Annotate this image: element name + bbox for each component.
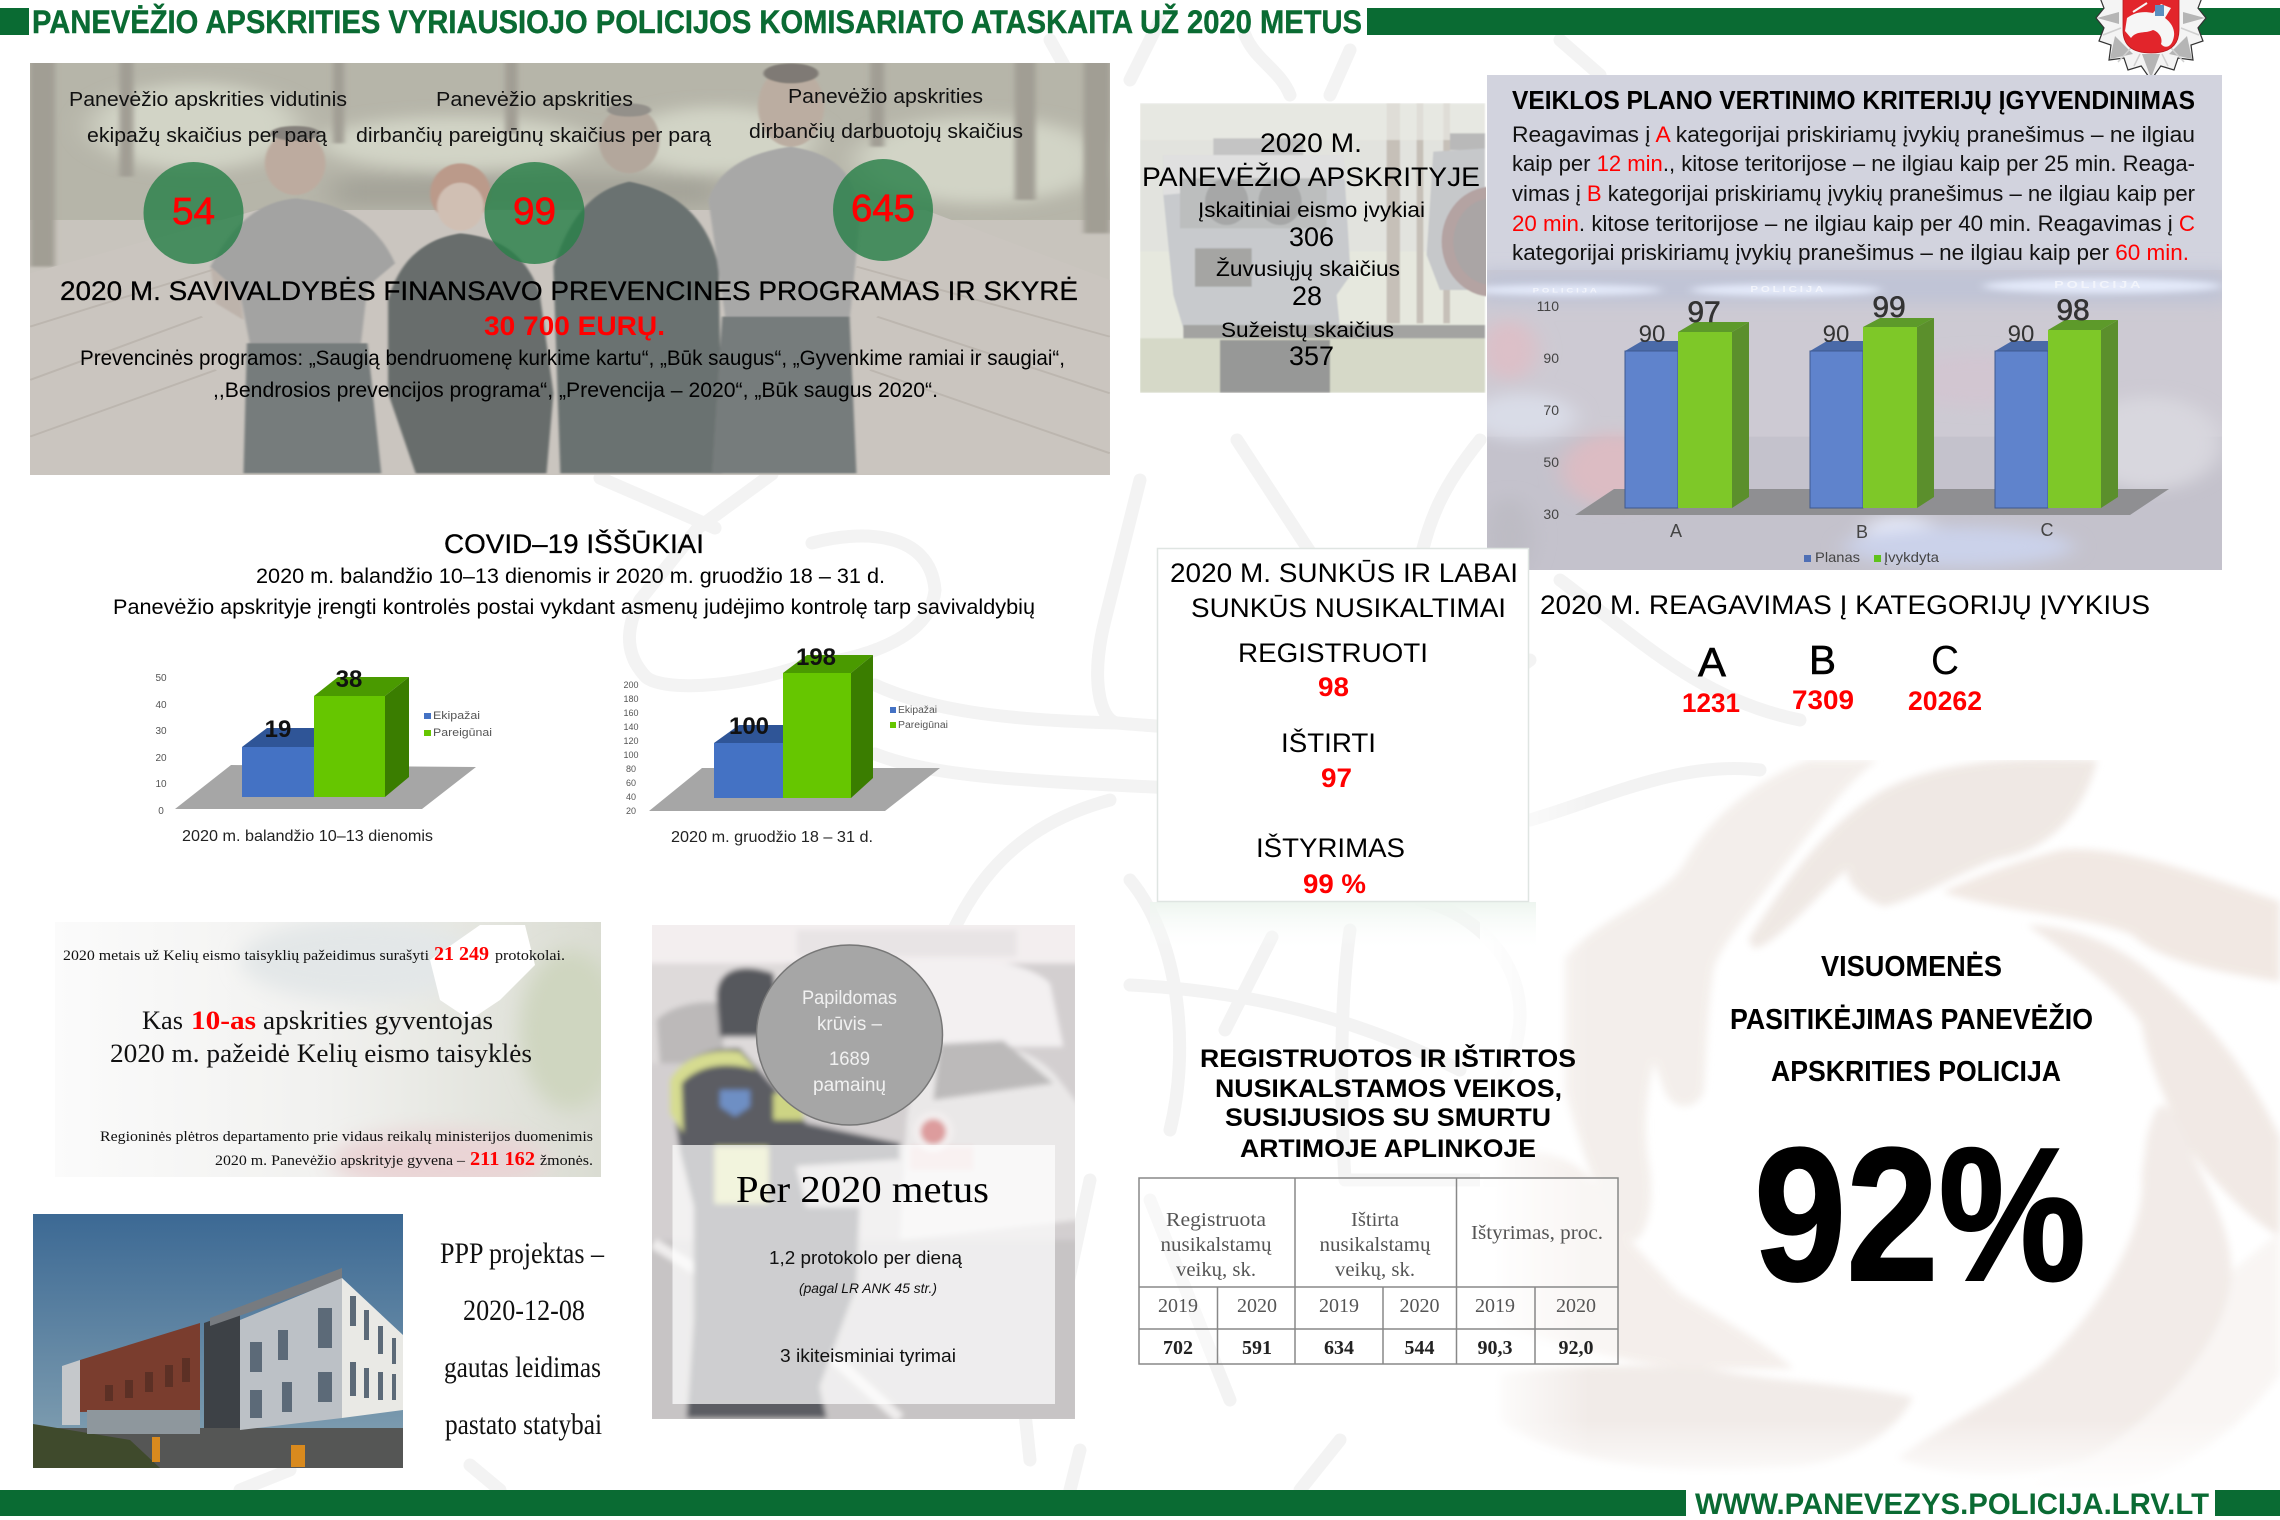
legend bbox=[424, 710, 492, 739]
table: Ištirta bbox=[1351, 1209, 1399, 1231]
image: new police building bbox=[33, 1214, 403, 1468]
bar chart: April 10-13: 10 bbox=[155, 779, 167, 790]
figures bbox=[1238, 638, 1428, 899]
heading: SUSIJUSIOS SU SMURTU bbox=[1225, 1104, 1551, 1132]
heading: PASITIKĖJIMAS PANEVĖŽIO bbox=[1730, 1002, 2093, 1036]
hand: upper left bbox=[1565, 760, 1878, 1241]
legend: Pareigūnai bbox=[898, 720, 948, 731]
category labels: B bbox=[1856, 522, 1868, 542]
legend: Ekipažai bbox=[898, 705, 937, 716]
paragraph: response time rules bbox=[1512, 122, 2195, 265]
table: 90,3 bbox=[1478, 1337, 1512, 1359]
bar chart: December 18-31: 160 bbox=[623, 708, 639, 718]
table: 634 bbox=[1324, 1337, 1354, 1359]
text block: prevention programmes: 30 700 EURŲ. bbox=[484, 311, 665, 341]
background watermark: police star bbox=[240, 20, 1800, 1490]
table: 2020 bbox=[1400, 1295, 1440, 1317]
heading: SUNKŪS NUSIKALTIMAI bbox=[1191, 593, 1506, 623]
footer bar bbox=[0, 1488, 2280, 1520]
panel: traffic violations: 211 162 bbox=[470, 1148, 535, 1170]
value labels bbox=[1639, 291, 2090, 348]
table: 2020 bbox=[1556, 1295, 1596, 1317]
accident figures: Žuvusiųjų skaičius bbox=[1216, 258, 1400, 281]
bar chart: plan vs done: 70 bbox=[1543, 402, 1559, 418]
table: 702 bbox=[1163, 1337, 1193, 1359]
hand: right bbox=[2027, 925, 2280, 1237]
panel: traffic violations bbox=[64, 922, 601, 1177]
panel: police officers photo with staff stats bbox=[30, 60, 1110, 480]
officer bbox=[717, 968, 780, 1037]
bar chart: December 18-31: 2020 m. gruodžio 18 – 31 d. bbox=[671, 829, 873, 846]
panel: traffic violations: apskrities gyventojas bbox=[263, 1006, 493, 1035]
heading bbox=[1170, 558, 1518, 623]
accident figures: 357 bbox=[1289, 341, 1334, 371]
category labels: C bbox=[2040, 520, 2054, 540]
camera housing bbox=[1163, 178, 1351, 326]
table: 2020 bbox=[1237, 1295, 1277, 1317]
table: 2019 bbox=[1158, 1295, 1198, 1317]
panel: traffic accidents with speed camera: PANEVĖŽIO APSKRITYJE bbox=[1142, 161, 1480, 192]
text block: staff captions bbox=[69, 86, 1023, 147]
legend: Planas bbox=[1815, 549, 1860, 565]
category A bbox=[1682, 639, 1740, 718]
legend: Ekipažai bbox=[433, 710, 480, 722]
bar chart: December 18-31: 200 bbox=[623, 680, 639, 690]
circle: extra workload: 1689 bbox=[829, 1049, 870, 1070]
bar chart: plan vs done: 90 bbox=[1543, 350, 1559, 366]
officer 2 bbox=[388, 163, 553, 473]
panel: traffic violations: 2020 metais už Kelių eismo taisyklių pažeidimus surašyti bbox=[63, 948, 429, 964]
circle: employees 645 bbox=[833, 159, 933, 261]
text block: PPP project: 2020-12-08 bbox=[463, 1294, 585, 1327]
heading: 2020 M. SUNKŪS IR LABAI bbox=[1170, 558, 1518, 588]
bar chart: April 10-13: 38 bbox=[336, 666, 362, 693]
text block: prevention programmes: Prevencinės programos: „Saugią bendruomenę kurkime kartu“, „Būk saugus“, „Gyvenkime ramiai ir saugiai“, bbox=[80, 347, 1065, 370]
table: 2019 bbox=[1475, 1295, 1515, 1317]
description: Panevėžio apskrityje įrengti kontrolės postai vykdant asmenų judėjimo kontrolę tarp savivaldybių bbox=[113, 596, 1035, 619]
bar chart: April 10-13 bbox=[155, 666, 492, 845]
heading: NUSIKALSTAMOS VEIKOS, bbox=[1215, 1075, 1562, 1103]
bar chart: December 18-31: 140 bbox=[623, 722, 639, 732]
bar chart: April 10-13: 50 bbox=[155, 673, 167, 684]
hand: top bbox=[1749, 759, 2097, 949]
description: 2020 m. balandžio 10–13 dienomis ir 2020 m. gruodžio 18 – 31 d. bbox=[256, 565, 885, 588]
hand: left lower bbox=[1525, 1155, 1788, 1370]
bar chart: December 18-31: 80 bbox=[626, 764, 636, 774]
value labels: 90 bbox=[1823, 321, 1849, 348]
panel: activity plan criteria: POLICIJA bbox=[1750, 286, 1826, 294]
bars B bbox=[1810, 318, 1934, 508]
bar chart: April 10-13: 19 bbox=[265, 716, 291, 743]
table: Registruota bbox=[1166, 1209, 1266, 1231]
bar chart: December 18-31: 20 bbox=[626, 806, 636, 816]
accident figures bbox=[1198, 199, 1425, 371]
value labels: 90 bbox=[2008, 321, 2034, 348]
circle: employees 645: 645 bbox=[851, 188, 915, 230]
accident figures: 306 bbox=[1289, 222, 1334, 252]
heading: COVID–19 IŠŠŪKIAI bbox=[444, 528, 704, 559]
category A: A bbox=[1698, 639, 1727, 685]
circle: officers 99: 99 bbox=[513, 191, 556, 233]
bars A bbox=[1625, 322, 1749, 508]
heading bbox=[1200, 1043, 1576, 1163]
bar chart: December 18-31: 60 bbox=[626, 778, 636, 788]
panel: traffic accidents with speed camera bbox=[1140, 103, 1486, 393]
legend: Įvykdyta bbox=[1884, 549, 1939, 565]
accident figures: 28 bbox=[1292, 281, 1322, 311]
circle: officers 99 bbox=[484, 162, 584, 264]
bar chart: plan vs done bbox=[1537, 291, 2169, 565]
table: 544 bbox=[1404, 1337, 1434, 1359]
table: nusikalstamų bbox=[1320, 1234, 1432, 1256]
paragraph: response time rules: kaip per 12 min., kitose teritorijose – ne ilgiau kaip per 25 min. Reaga- bbox=[1512, 151, 2195, 176]
text block: PPP project bbox=[440, 1237, 605, 1441]
category C: 20262 bbox=[1908, 686, 1982, 716]
value labels: 99 bbox=[1872, 291, 1906, 324]
arm: top right bbox=[1943, 849, 2280, 982]
panel: traffic violations: 2020 m. pažeidė Kelių eismo taisyklės bbox=[110, 1039, 532, 1068]
table: 591 bbox=[1242, 1337, 1272, 1359]
panel: traffic violations: žmonės. bbox=[540, 1153, 593, 1169]
icon: police star badge bbox=[2096, 0, 2206, 80]
text block: staff captions: Panevėžio apskrities bbox=[436, 89, 633, 111]
big number: 92% bbox=[1754, 1109, 2086, 1321]
panel: serious crimes bbox=[1150, 548, 1536, 952]
figures: 99 % bbox=[1303, 869, 1366, 899]
officer 3 bbox=[553, 103, 722, 473]
arm: lower right wrist bbox=[1998, 1232, 2280, 1500]
panel: traffic violations: Kas bbox=[142, 1006, 183, 1035]
second camera unit bbox=[1450, 133, 1485, 150]
text block: prevention programmes: ,,Bendrosios prevencijos programa“, „Prevencija – 2020“, „Būk saugus 2020“. bbox=[213, 379, 938, 402]
panel: traffic violations: 2020 m. Panevėžio apskrityje gyvena – bbox=[215, 1153, 466, 1169]
heading: VEIKLOS PLANO VERTINIMO KRITERIJŲ ĮGYVENDINIMAS bbox=[1512, 85, 2195, 115]
text block: staff captions: Panevėžio apskrities bbox=[788, 86, 983, 108]
bar chart: December 18-31: 180 bbox=[623, 694, 639, 704]
panel: activity plan criteria: POLICIJA bbox=[1533, 287, 1600, 294]
table: veikų, sk. bbox=[1335, 1259, 1415, 1281]
panel: traffic violations: protokolai. bbox=[495, 948, 565, 964]
heading: 2020 M. bbox=[1260, 128, 1362, 158]
table: Ištyrimas, proc. bbox=[1471, 1222, 1603, 1244]
bar chart: plan vs done: 110 bbox=[1537, 298, 1559, 314]
figures: IŠTYRIMAS bbox=[1256, 832, 1405, 863]
details: 3 ikiteisminiai tyrimai bbox=[780, 1346, 956, 1366]
heading: ARTIMOJE APLINKOJE bbox=[1240, 1135, 1536, 1163]
value labels: 90 bbox=[1639, 321, 1665, 348]
table: 92,0 bbox=[1558, 1337, 1594, 1359]
paragraph: response time rules: kategorijai priskiriamų įvykių pranešimus – ne ilgiau kaip per 60 min. bbox=[1512, 240, 2189, 265]
text block: PPP project: gautas leidimas bbox=[444, 1351, 601, 1384]
panel: traffic officer workload bbox=[647, 920, 1080, 1423]
bar chart: December 18-31 bbox=[623, 644, 948, 846]
category C bbox=[1908, 637, 1982, 716]
title: PANEVĖŽIO APSKRITIES VYRIAUSIOJO POLICIJOS KOMISARIATO ATASKAITA UŽ 2020 METUS bbox=[32, 4, 1362, 40]
paragraph: response time rules: vimas į B kategorijai priskiriamų įvykių pranešimus – ne ilgiau kaip per bbox=[1512, 181, 2195, 206]
paragraph: response time rules: Reagavimas į A kategorijai priskiriamų įvykių pranešimus – ne ilgiau bbox=[1512, 122, 2195, 147]
heading: APSKRITIES POLICIJA bbox=[1771, 1056, 2061, 1088]
panel: activity plan criteria bbox=[1470, 75, 2230, 580]
category B: B bbox=[1809, 637, 1836, 683]
header bar bbox=[0, 4, 2280, 40]
legend: Pareigūnai bbox=[433, 727, 492, 739]
text block: prevention programmes: 2020 M. SAVIVALDYBĖS FINANSAVO PREVENCINES PROGRAMAS IR SKYRĖ bbox=[60, 275, 1078, 306]
description bbox=[113, 565, 1035, 619]
panel: response to category events bbox=[1540, 590, 2150, 718]
figures: 98 bbox=[1318, 672, 1349, 702]
legend bbox=[890, 705, 948, 731]
panel: response to category events: 2020 M. REAGAVIMAS Į KATEGORIJŲ ĮVYKIUS bbox=[1540, 590, 2150, 620]
circle: extra workload: pamainų bbox=[813, 1075, 886, 1096]
circle: extra workload: krūvis – bbox=[817, 1014, 882, 1035]
bars C bbox=[1995, 320, 2118, 508]
bar chart: April 10-13: 40 bbox=[155, 700, 167, 711]
category labels: A bbox=[1670, 521, 1682, 541]
text block: staff captions: dirbančių pareigūnų skaičius per parą bbox=[356, 125, 712, 147]
category B: 7309 bbox=[1792, 685, 1854, 715]
accident figures: Sužeistų skaičius bbox=[1221, 319, 1394, 342]
officer 1 bbox=[210, 126, 395, 473]
text block: prevention programmes bbox=[60, 275, 1078, 402]
details: (pagal LR ANK 45 str.) bbox=[799, 1280, 937, 1296]
table: nusikalstamų bbox=[1160, 1234, 1273, 1256]
panel: traffic violations: 21 249 bbox=[434, 943, 489, 965]
bar chart: December 18-31: 120 bbox=[623, 736, 639, 746]
paragraph: response time rules: 20 min. kitose teritorijose – ne ilgiau kaip per 40 min. Reagavimas į C bbox=[1512, 211, 2195, 236]
panel: covid-19 challenges bbox=[113, 528, 1035, 846]
circle: extra workload: Papildomas bbox=[802, 988, 897, 1009]
panel: domestic violence offences bbox=[1139, 1043, 1618, 1364]
panel: traffic violations: Regioninės plėtros departamento prie vidaus reikalų ministerijos duomenimis bbox=[100, 1129, 593, 1145]
text block: staff captions: Panevėžio apskrities vidutinis bbox=[69, 89, 347, 111]
circle: patrol crews 54 bbox=[144, 162, 244, 264]
category B bbox=[1792, 637, 1854, 715]
hand: lower right bbox=[1898, 1105, 2231, 1476]
category A: 1231 bbox=[1682, 688, 1740, 718]
hand: bottom left bbox=[1500, 1366, 1913, 1470]
bar chart: April 10-13: 20 bbox=[155, 753, 167, 764]
bar chart: December 18-31: 40 bbox=[626, 792, 636, 802]
panel: activity plan criteria: POLICIJA bbox=[2054, 279, 2143, 290]
details bbox=[769, 1248, 963, 1366]
category labels bbox=[1670, 520, 2054, 542]
figures: IŠTIRTI bbox=[1281, 727, 1376, 758]
bar chart: December 18-31: 100 bbox=[729, 713, 769, 740]
legend bbox=[1804, 549, 1939, 565]
panel: hands ring background bbox=[1480, 759, 2280, 1500]
mount and post bbox=[1183, 325, 1485, 338]
details: 1,2 protokolo per dieną bbox=[769, 1248, 963, 1268]
text block: staff captions: ekipažų skaičius per parą bbox=[87, 125, 328, 147]
accident figures: Įskaitiniai eismo įvykiai bbox=[1198, 199, 1425, 222]
bar chart: plan vs done: 30 bbox=[1543, 506, 1559, 522]
category C: C bbox=[1931, 637, 1959, 683]
bar chart: plan vs done: 50 bbox=[1543, 454, 1559, 470]
circle: extra workload bbox=[756, 945, 942, 1125]
heading: VISUOMENĖS bbox=[1821, 951, 2002, 983]
circle: patrol crews 54: 54 bbox=[172, 191, 215, 233]
text block: staff captions: dirbančių darbuotojų skaičius bbox=[749, 121, 1023, 143]
bar chart: April 10-13: 2020 m. balandžio 10–13 dienomis bbox=[182, 828, 433, 845]
panel: public trust bbox=[1730, 951, 2093, 1321]
bar chart: April 10-13: 0 bbox=[158, 806, 164, 817]
heading bbox=[1730, 951, 2093, 1088]
figures: 97 bbox=[1321, 763, 1352, 793]
table: veikų, sk. bbox=[1176, 1259, 1256, 1281]
text block: PPP project: pastato statybai bbox=[445, 1408, 602, 1441]
value labels: 97 bbox=[1687, 296, 1721, 329]
value labels: 98 bbox=[2056, 294, 2090, 327]
text block: PPP project: PPP projektas – bbox=[440, 1237, 605, 1270]
heading: Per 2020 metus bbox=[736, 1169, 989, 1211]
bar chart: April 10-13: 30 bbox=[155, 726, 167, 737]
bar chart: December 18-31: 100 bbox=[623, 750, 639, 760]
heading: REGISTRUOTOS IR IŠTIRTOS bbox=[1200, 1043, 1576, 1073]
panel: traffic violations: 10-as bbox=[191, 1006, 256, 1035]
table bbox=[1139, 1178, 1618, 1364]
table: 2019 bbox=[1319, 1295, 1359, 1317]
officer 4 bbox=[708, 63, 860, 473]
bar chart: December 18-31: 198 bbox=[796, 644, 836, 671]
figures: REGISTRUOTI bbox=[1238, 638, 1428, 668]
